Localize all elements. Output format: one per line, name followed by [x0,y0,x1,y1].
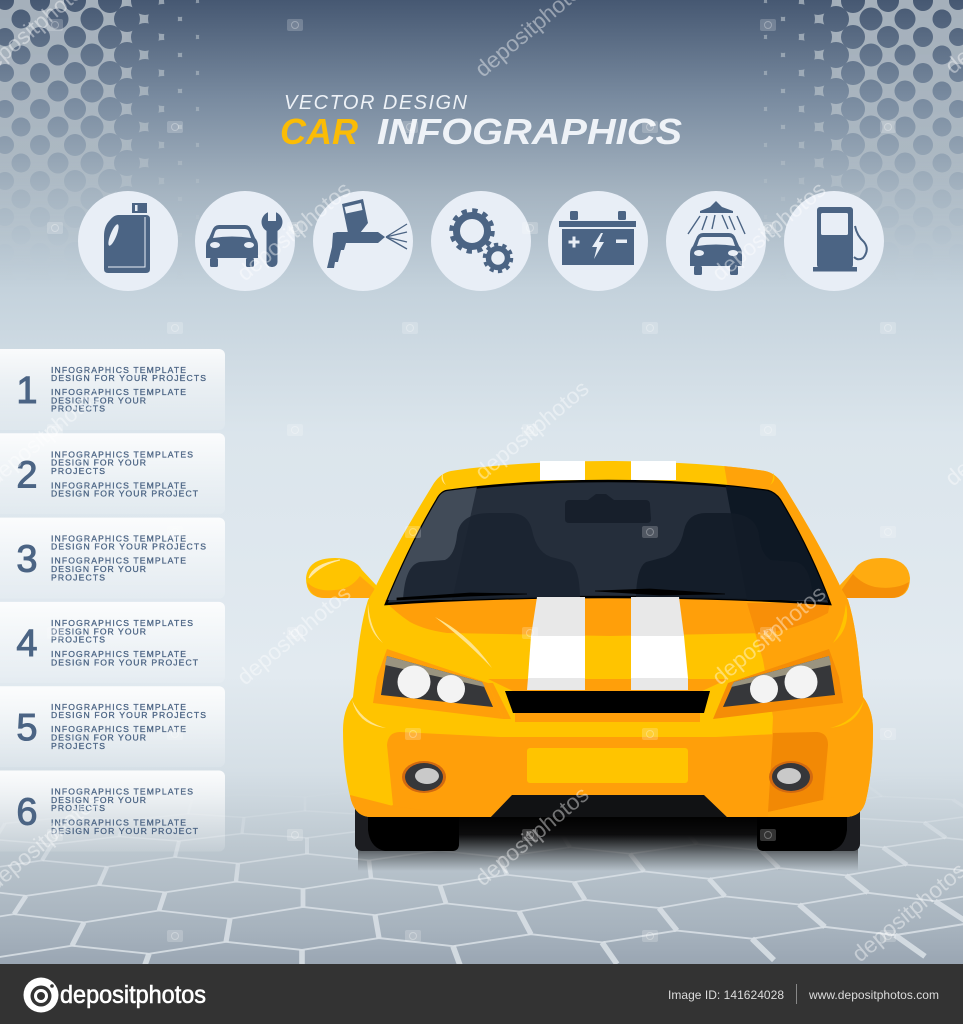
image id: Image ID: 141624028 [668,988,784,1002]
panel: item 5: INFOGRAPHICS TEMPLATE [51,702,186,712]
title: CAR [280,111,358,152]
left fog lamp [402,761,446,793]
hood shade [384,598,755,636]
divider [796,984,797,1004]
lower intake [491,795,727,817]
icon row [78,191,884,291]
car [306,458,910,871]
orange band above grille [488,679,728,722]
right fog lamp [769,761,813,793]
panel: item 1: INFOGRAPHICS TEMPLATE [51,365,186,375]
title: VECTOR DESIGN [284,92,468,114]
panel: item 4: DESIGN FOR YOUR [51,626,146,636]
watermarks: depositphotos [232,581,356,690]
lower bumper panel [387,732,772,817]
panel: item 4: INFOGRAPHICS TEMPLATES [51,618,193,628]
windshield [380,481,840,604]
wipers [397,589,725,600]
footer bar [0,964,963,1024]
panel: item 2: INFOGRAPHICS TEMPLATE [51,480,186,490]
panel: item 4: INFOGRAPHICS TEMPLATE [51,649,186,659]
body highlights [352,473,492,728]
watermarks: depositphotos [707,581,831,690]
left headlight surround [373,649,503,719]
panel: item 1: INFOGRAPHICS TEMPLATE [51,387,186,397]
right side shading [723,458,880,820]
panel: item 5: INFOGRAPHICS TEMPLATE [51,724,186,734]
panel: item 6: DESIGN FOR YOUR PROJECT [51,826,199,836]
panel: item 3: PROJECTS [51,572,105,582]
panel: item 4: PROJECTS [51,635,105,645]
site url: www.depositphotos.com [808,988,939,1002]
logo text: depositphotos [60,981,206,1009]
panel: item 2: 2 [16,454,38,496]
panel: item 2: DESIGN FOR YOUR [51,458,146,468]
left headlight [381,656,493,707]
grille [505,691,710,713]
hood stripes [527,597,688,690]
panel: item 2: PROJECTS [51,466,105,476]
panel: item 4: 4 [16,623,38,665]
right wheel [757,800,860,851]
panel: item 1: DESIGN FOR YOUR PROJECTS [51,373,206,383]
panel: item 4: DESIGN FOR YOUR PROJECT [51,657,199,667]
panel: item 1 [0,349,225,430]
panel: item 2: DESIGN FOR YOUR PROJECT [51,489,199,499]
panel: item 6: DESIGN FOR YOUR [51,795,146,805]
right lower corner [846,800,866,817]
panel: item 6: INFOGRAPHICS TEMPLATES [51,786,193,796]
panel: item 3 [0,518,225,599]
panel: item 6 [0,770,225,852]
panel: item 3: DESIGN FOR YOUR PROJECTS [51,542,206,552]
panel: item 5 [0,686,225,767]
icon: oil canister [78,191,178,291]
roof stripes [540,461,676,480]
icon: car wash [666,191,766,291]
panel: item 6: 6 [16,792,38,834]
panel: item 6: INFOGRAPHICS TEMPLATE [51,818,186,828]
title: INFOGRAPHICS [377,111,682,152]
icon: gears [431,191,531,291]
logo icon [24,978,58,1012]
car body [340,458,880,830]
panel: item 3: INFOGRAPHICS TEMPLATE [51,533,186,543]
halftone pattern left [0,0,200,208]
left wheel [355,800,459,851]
watermarks: depositphotos [470,376,594,485]
panel: item 5: 5 [16,707,38,749]
panel: item 6: PROJECTS [51,803,105,813]
panel: item 2 [0,433,225,514]
icon: fuel pump [784,191,884,291]
panel: item 2: INFOGRAPHICS TEMPLATES [51,449,193,459]
right body highlights [770,473,864,728]
hexagon floor [0,774,963,983]
panel: item 3: 3 [16,539,38,581]
watermarks: depositphotos [232,177,356,286]
panel: item 1: 1 [16,370,38,412]
panel: item 3: INFOGRAPHICS TEMPLATE [51,556,186,566]
panel: item 4 [0,602,225,683]
left mirror [306,558,376,598]
panel: item 3: DESIGN FOR YOUR [51,564,146,574]
right mirror [840,558,910,598]
licence plate [527,748,688,783]
icon: battery [548,191,648,291]
panel: item 5: DESIGN FOR YOUR [51,732,146,742]
right darker panel [768,732,828,812]
lower left bumper corner [350,795,391,817]
icon: spray gun [313,191,413,291]
panel: item 5: PROJECTS [51,741,105,751]
right headlight [723,656,835,707]
watermarks: depositphotos [470,782,594,891]
watermarks: depositphotos [707,177,831,286]
yellow lines by grille [488,683,511,719]
right headlight surround [713,649,843,719]
title [280,92,682,152]
halftone pattern right [764,0,963,208]
car shadow [358,815,858,871]
icon: car and wrench [195,191,295,291]
panel: item 1: DESIGN FOR YOUR [51,395,146,405]
panel: item 1: PROJECTS [51,404,105,414]
panel: item 5: DESIGN FOR YOUR PROJECTS [51,710,206,720]
